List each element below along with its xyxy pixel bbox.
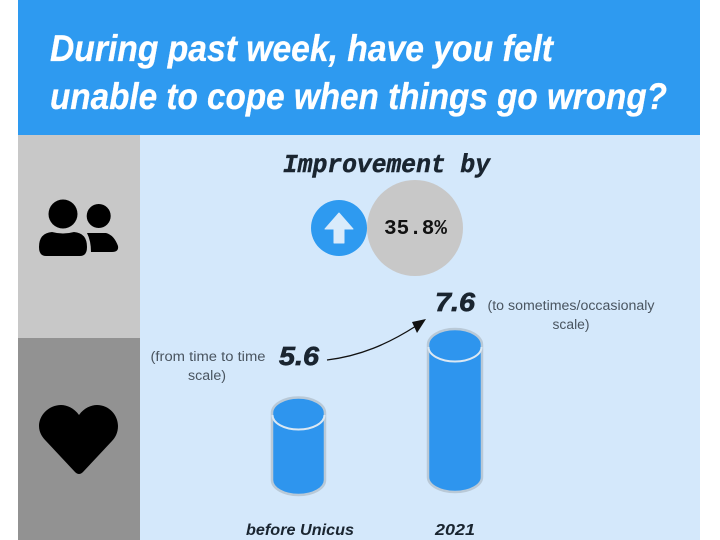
value: 7.6: 7.6 xyxy=(435,287,476,317)
value: 5.6: 5.6 xyxy=(279,341,320,371)
text: from scale note: scale) xyxy=(188,368,226,383)
panel: header banner xyxy=(18,0,700,135)
text: to scale note: (to sometimes/occasionaly xyxy=(488,298,655,313)
text: to scale note: scale) xyxy=(552,317,590,332)
icon: people xyxy=(39,200,118,256)
arrow: growth curve xyxy=(327,319,426,360)
title: During past week, have you felt xyxy=(50,28,555,69)
text: from scale note xyxy=(150,349,266,383)
title xyxy=(50,28,667,117)
text: to scale note xyxy=(488,298,655,332)
label: before Unicus: before Unicus xyxy=(246,522,354,539)
bar: before Unicus cylinder xyxy=(272,398,325,495)
panel: people sidebar xyxy=(18,135,140,338)
icon: up arrow in blue circle xyxy=(311,200,367,256)
icon: heart xyxy=(39,405,118,474)
panel: heart sidebar xyxy=(18,338,140,540)
heading: improvement by: Improvement by xyxy=(283,150,491,180)
title: unable to cope when things go wrong? xyxy=(50,76,667,117)
bar: 2021 cylinder xyxy=(428,329,482,492)
text: from scale note: (from time to time xyxy=(150,349,266,364)
callout: percentage circle xyxy=(367,180,463,276)
label: 2021: 2021 xyxy=(434,522,475,539)
callout: percentage circle: 35.8% xyxy=(384,218,447,241)
panel: chart background xyxy=(140,135,700,540)
